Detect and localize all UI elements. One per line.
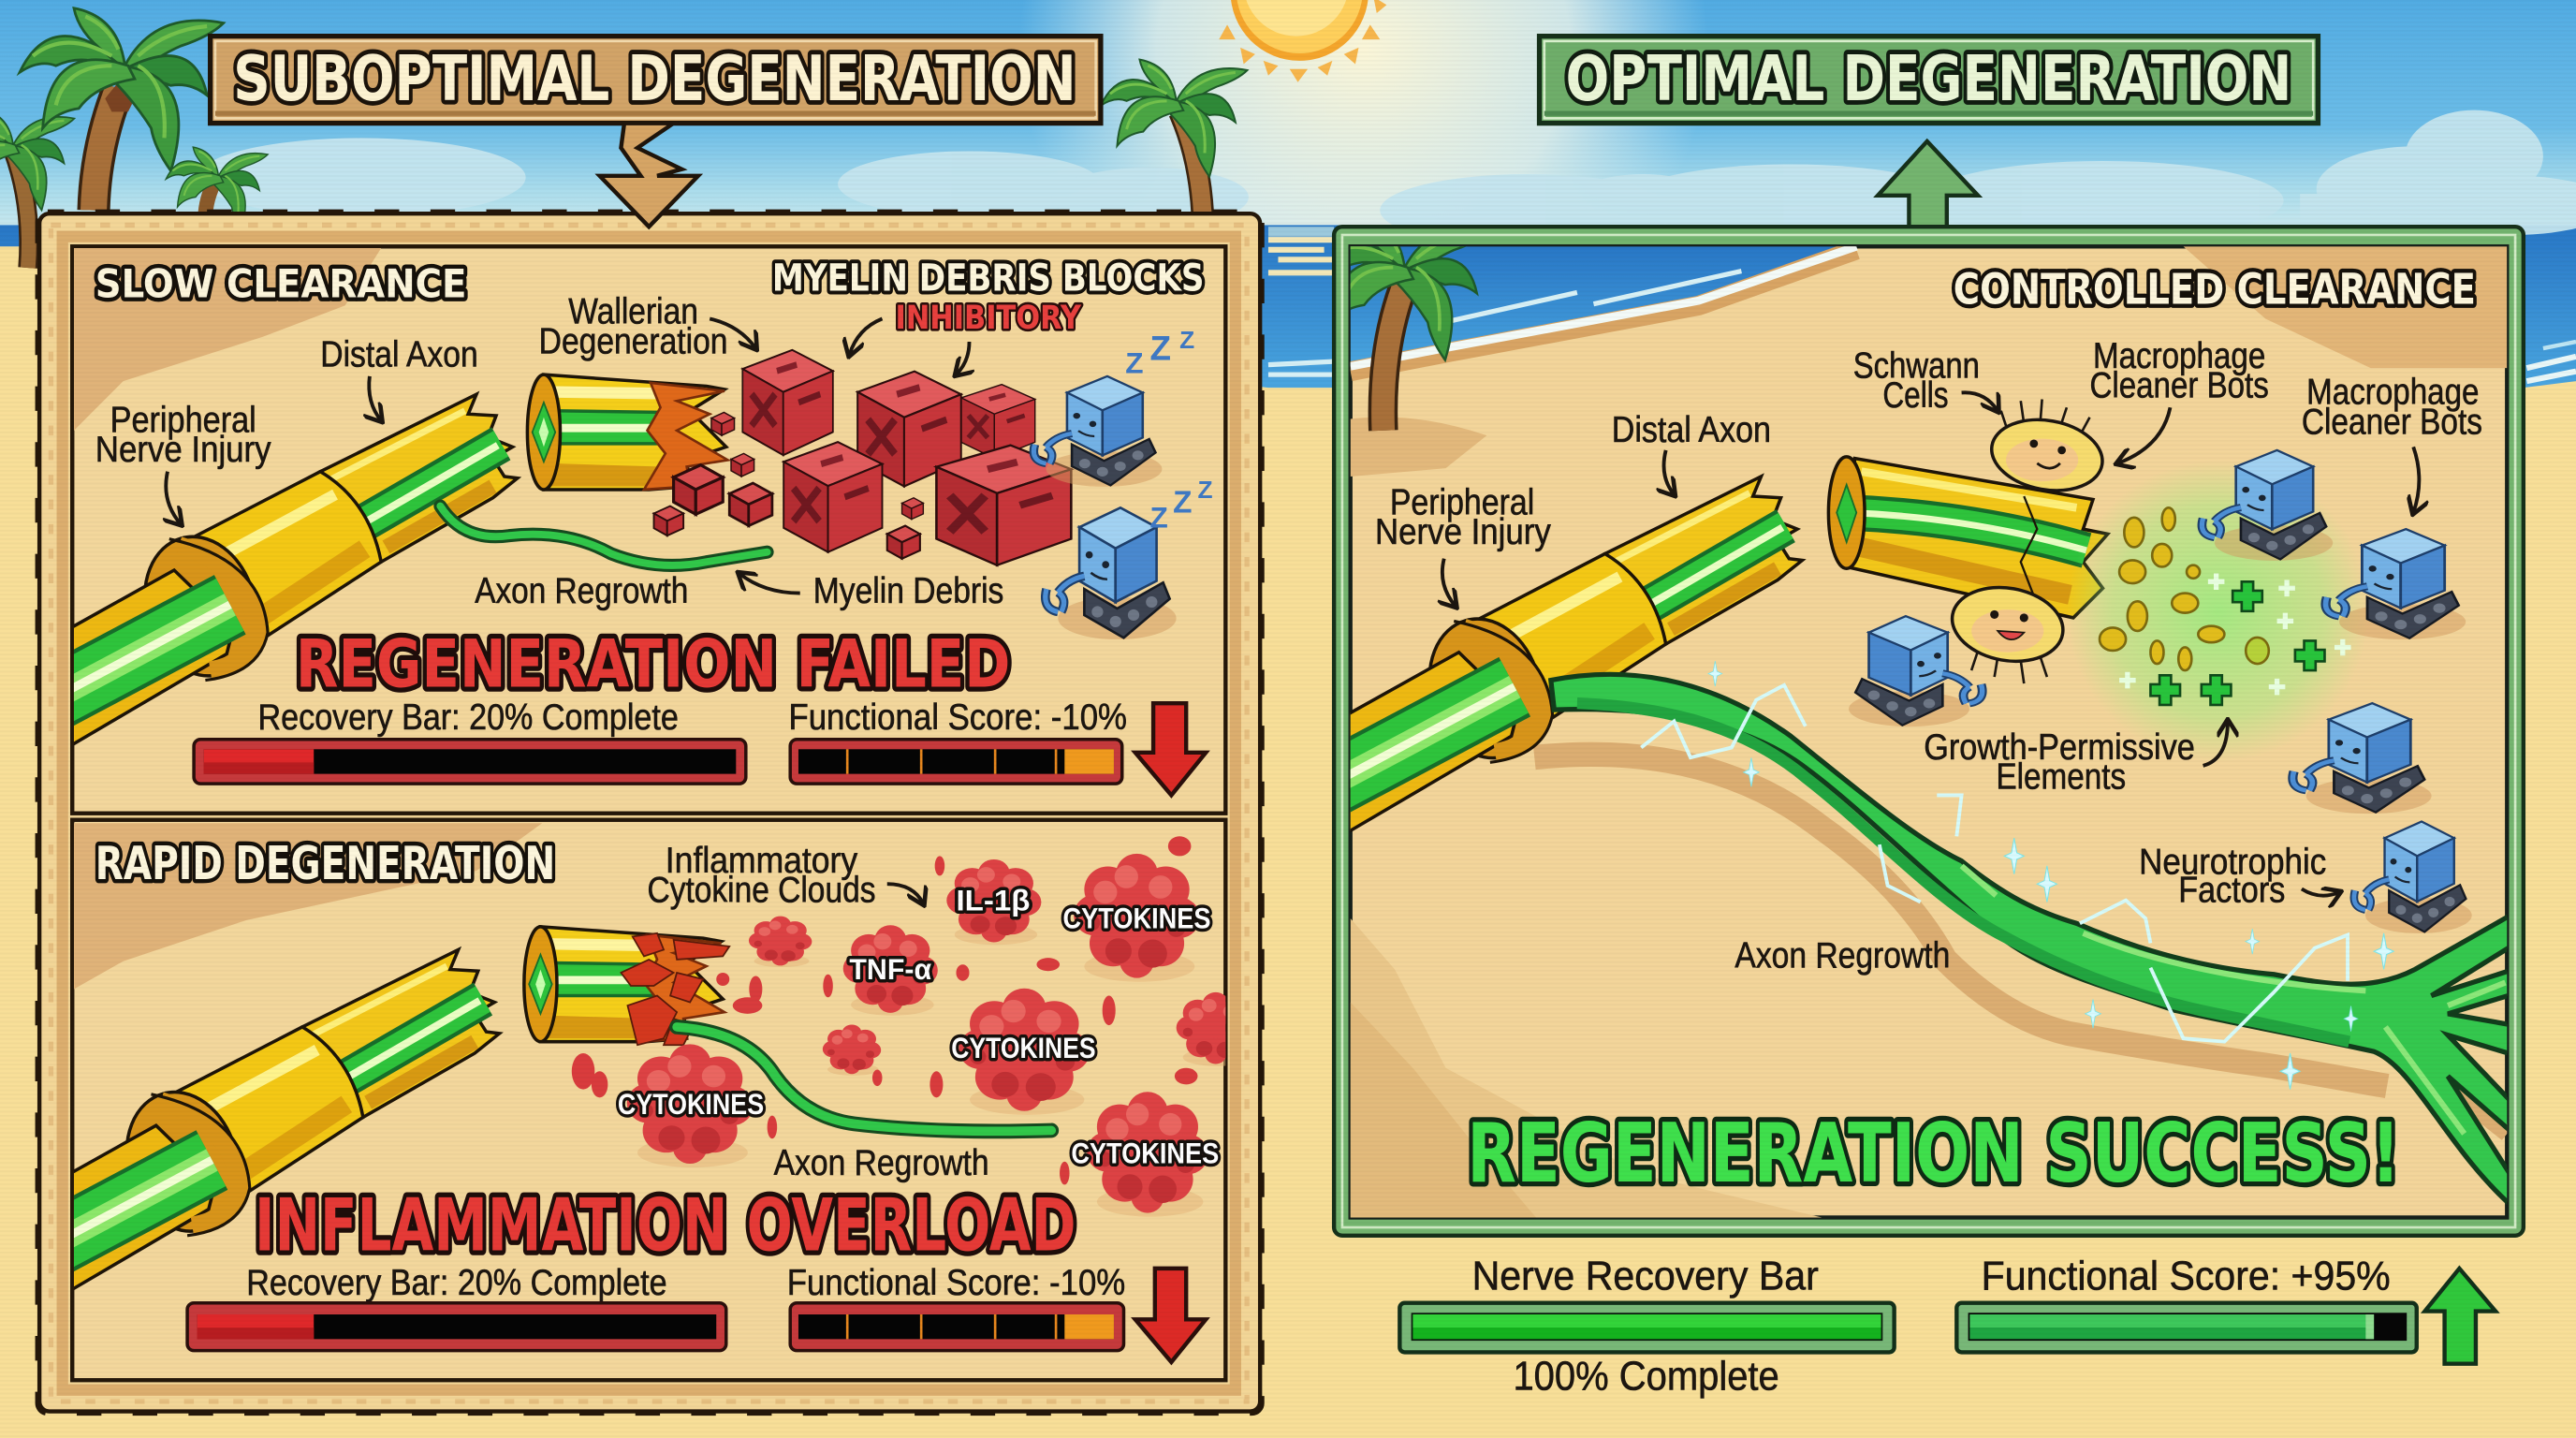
schwann cell top	[1990, 399, 2104, 492]
label: neurotrophic factors: Neurotrophic	[2139, 843, 2326, 883]
label: peripheral nerve injury: Peripheral	[110, 401, 256, 441]
nerve: clearing distal segment	[1828, 457, 2108, 618]
sun	[1219, 0, 1386, 82]
arrow: score down	[1135, 703, 1206, 795]
status: inflammation overload: INFLAMMATION OVERLOAD	[255, 1184, 1076, 1269]
label: peripheral nerve injury: Nerve Injury	[1375, 512, 1551, 552]
arrow: cytokine clouds pointer	[887, 884, 923, 903]
label: inflammatory cytokine clouds: Cytokine Clouds	[648, 871, 875, 911]
label: 100 percent complete: 100% Complete	[1513, 1354, 1779, 1400]
label: nerve recovery bar: Nerve Recovery Bar	[1472, 1254, 1819, 1299]
label: wallerian degeneration: Wallerian	[568, 292, 698, 332]
arrow: up to optimal banner	[1878, 141, 1978, 230]
panel: slow clearance	[0, 246, 1225, 814]
label: axon regrowth: Axon Regrowth	[1734, 936, 1950, 976]
cloud labels: CYTOKINES	[1071, 1137, 1219, 1170]
recovery bar	[187, 1303, 726, 1351]
cloud labels: TNF-α	[849, 952, 932, 986]
macrophage bots sleeping	[1033, 376, 1177, 639]
functional score bar	[790, 1303, 1123, 1351]
label: inhibitory: INHIBITORY	[896, 299, 1081, 337]
sand shading	[1351, 246, 2507, 1217]
banner: optimal degeneration: OPTIMAL DEGENERATION	[1566, 42, 2291, 115]
label: functional score plus 95: Functional Score: +95%	[1982, 1254, 2391, 1299]
axon regrowth thin	[677, 1027, 1051, 1131]
cloud labels: CYTOKINES	[1063, 902, 1211, 935]
zzz marks: Z	[1125, 345, 1144, 379]
label: axon regrowth: Axon Regrowth	[475, 571, 688, 611]
beach sea	[1351, 246, 1856, 372]
panel: suboptimal frame	[37, 212, 1262, 1413]
nerve recovery bar	[1399, 1303, 1895, 1352]
cleaner bots	[1849, 450, 2472, 933]
palm tree in panel	[1350, 246, 1479, 431]
label: macrophage cleaner bots: Macrophage	[2093, 336, 2265, 376]
label: distal axon: Distal Axon	[320, 334, 478, 374]
label: distal axon: Distal Axon	[1612, 410, 1771, 450]
regrowing axon trunk	[1551, 674, 2513, 1208]
nerve: proximal stump	[73, 946, 504, 1290]
arrows: panel one pointers	[166, 318, 970, 594]
label: neurotrophic factors: Factors	[2178, 871, 2285, 911]
arrow: score up	[2425, 1269, 2496, 1364]
myelin debris blocks	[654, 350, 1071, 565]
banner: suboptimal degeneration: SUBOPTIMAL DEGENERATION	[233, 42, 1076, 115]
heading: rapid degeneration: RAPID DEGENERATION	[95, 836, 555, 890]
cloud labels	[618, 883, 1219, 1170]
label: functional score: Functional Score: -10%	[788, 697, 1127, 738]
nerve: degenerating distal segment	[527, 374, 728, 490]
zzz marks: Z	[1150, 329, 1171, 367]
label: macrophage cleaner bots: Cleaner Bots	[2089, 366, 2269, 406]
zzz marks: Z	[1179, 326, 1194, 354]
arrows: optimal panel pointers	[1442, 392, 2419, 896]
arrow: lightning arrow down	[600, 124, 698, 227]
panel: controlled clearance	[1277, 217, 2524, 1236]
cloud labels: CYTOKINES	[951, 1031, 1096, 1064]
panel: rapid degeneration	[0, 820, 1255, 1380]
schwann cell bottom	[1951, 586, 2065, 683]
label: schwann cells: Cells	[1882, 375, 1949, 416]
label: growth-permissive elements: Elements	[1996, 756, 2126, 797]
label: axon regrowth: Axon Regrowth	[774, 1143, 989, 1183]
palm trees left	[0, 8, 268, 268]
axon regrowth thin	[440, 506, 768, 565]
label: peripheral nerve injury: Peripheral	[1390, 482, 1534, 522]
label: inflammatory cytokine clouds: Inflammatory	[666, 841, 858, 881]
sparks and lightning	[1641, 661, 2393, 1090]
cytokine clouds	[572, 836, 1255, 1217]
label: functional score: Functional Score: -10%	[787, 1263, 1125, 1303]
heading: slow clearance: SLOW CLEARANCE	[95, 261, 466, 307]
functional score bar	[790, 740, 1122, 784]
label: wallerian degeneration: Degeneration	[539, 321, 728, 361]
heading: myelin debris blocks: MYELIN DEBRIS BLOCKS	[772, 257, 1204, 301]
label: myelin debris: Myelin Debris	[813, 571, 1003, 611]
label: recovery bar: Recovery Bar: 20% Complete	[258, 697, 679, 738]
zzz marks: Z	[1173, 486, 1193, 521]
zzz marks: Z	[1197, 476, 1213, 504]
palm tree right of banner	[1101, 60, 1247, 213]
nerve: inflamed distal segment	[524, 927, 729, 1045]
arrow: score down	[1135, 1269, 1206, 1362]
label: schwann cells: Schwann	[1853, 346, 1980, 387]
cloud labels: CYTOKINES	[618, 1087, 764, 1121]
nerve: proximal stump	[1350, 473, 1807, 832]
label: macrophage cleaner bots right: Cleaner Bots	[2302, 402, 2482, 442]
cloud labels: IL-1β	[956, 883, 1030, 917]
functional score bar	[1956, 1303, 2417, 1352]
zzz marks: Z	[1150, 500, 1168, 534]
status: regeneration failed: REGENERATION FAILED	[296, 626, 1010, 703]
label: peripheral nerve injury: Nerve Injury	[95, 430, 271, 470]
zzz marks	[1125, 326, 1213, 534]
label: growth-permissive elements: Growth-Permissive	[1924, 727, 2195, 768]
heading: controlled clearance: CONTROLLED CLEARANCE	[1954, 265, 2476, 315]
nerve: proximal stump	[73, 391, 522, 745]
recovery bar	[194, 740, 746, 784]
label: macrophage cleaner bots right: Macrophage	[2306, 373, 2479, 413]
growth-permissive glow and elements	[2071, 470, 2359, 753]
label: recovery bar: Recovery Bar: 20% Complete	[246, 1263, 667, 1303]
